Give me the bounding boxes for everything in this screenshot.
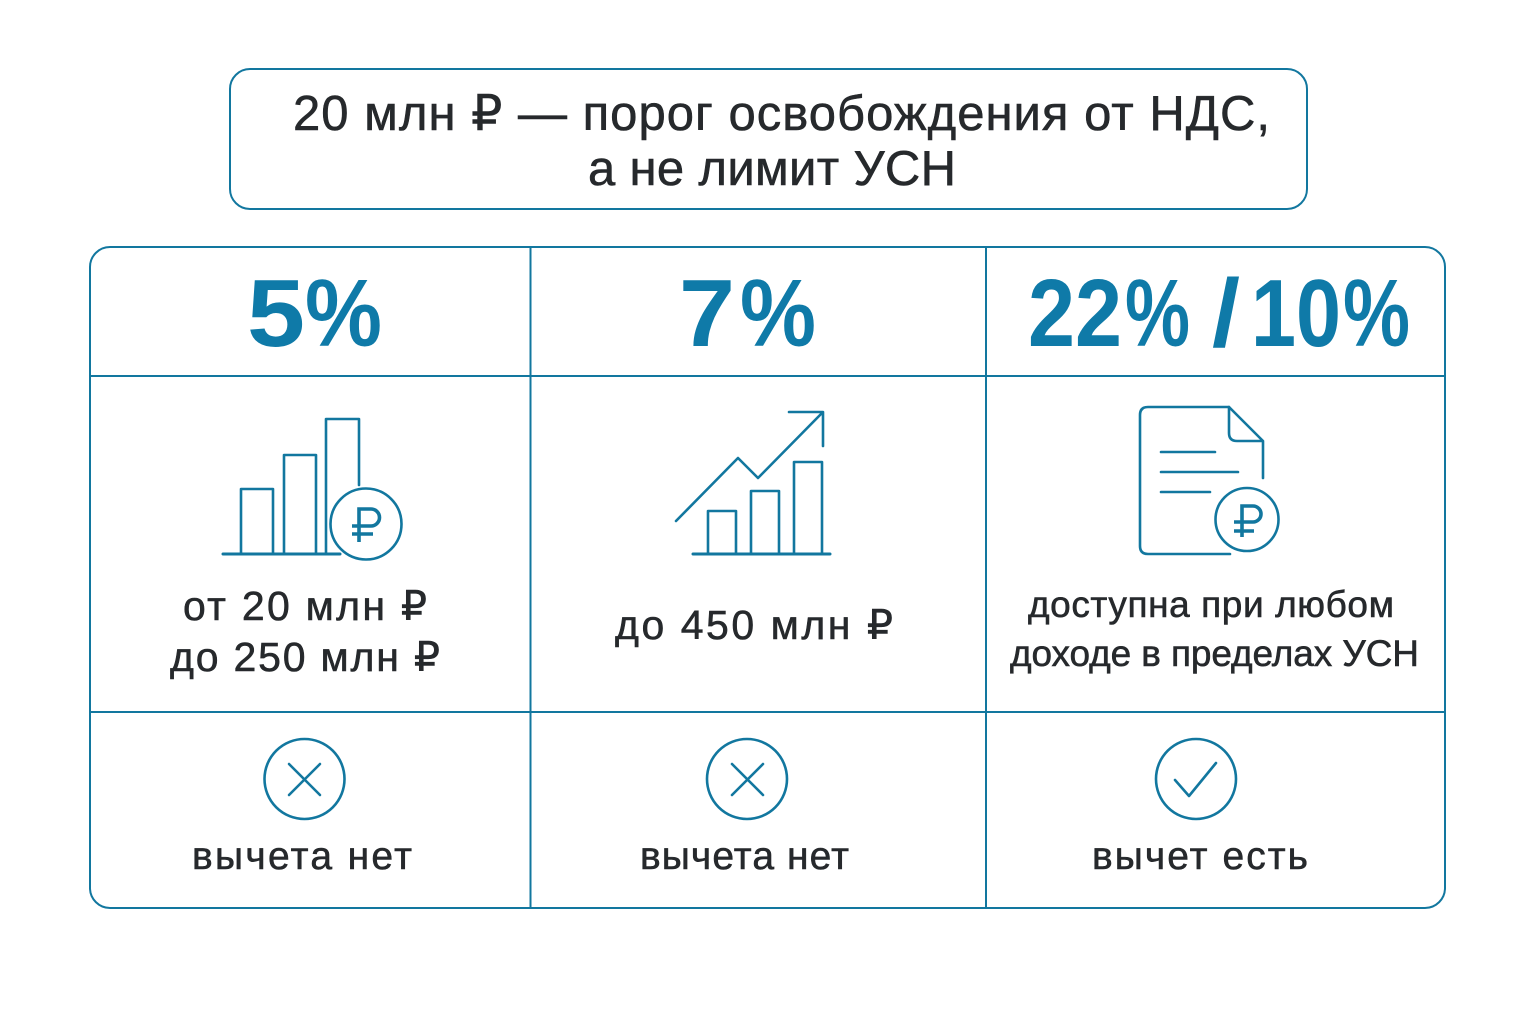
rate: 7%: 7 bbox=[679, 260, 735, 367]
title: 20 млн ₽ — порог освобождения от НДС, bbox=[293, 87, 1270, 141]
text: 5% income range bbox=[170, 583, 440, 680]
text: 5% income range: до 250 млн ₽ bbox=[170, 634, 440, 680]
label: deduction available: вычет есть bbox=[1092, 835, 1308, 878]
rate: 22% / 10%: % bbox=[1343, 260, 1410, 367]
rate: 5%: % bbox=[305, 260, 382, 367]
label: no deduction 2: вычета нет bbox=[640, 835, 849, 878]
icon: cross 1 bbox=[264, 739, 344, 819]
rate: 22% / 10%: 10 bbox=[1251, 260, 1341, 367]
title box bbox=[230, 69, 1307, 209]
rate: 5%: 5 bbox=[247, 260, 305, 367]
icon: bar chart with ruble bbox=[223, 419, 402, 560]
icon: document with ruble bbox=[1140, 407, 1278, 554]
text: 5% income range: от 20 млн ₽ bbox=[183, 583, 427, 629]
rate: 22% / 10% bbox=[1028, 260, 1410, 367]
icon: growth chart with arrow bbox=[676, 412, 830, 554]
rate: 5% bbox=[247, 260, 382, 367]
text: general availability: доступна при любом bbox=[1028, 584, 1394, 625]
icon: check bbox=[1156, 739, 1236, 819]
text: general availability: доходе в пределах УСН bbox=[1010, 633, 1419, 674]
rate: 22% / 10%: / bbox=[1212, 260, 1240, 367]
comparison table bbox=[90, 247, 1445, 908]
label: no deduction 1: вычета нет bbox=[192, 835, 412, 878]
text: general availability bbox=[1010, 584, 1419, 674]
rate: 22% / 10%: 22 bbox=[1028, 260, 1122, 367]
rate: 7% bbox=[679, 260, 816, 367]
title bbox=[293, 87, 1270, 196]
icon: cross 2 bbox=[707, 739, 787, 819]
title: а не лимит УСН bbox=[588, 142, 956, 196]
rate: 7%: % bbox=[740, 260, 816, 367]
text: 7% income range: до 450 млн ₽ bbox=[615, 602, 893, 648]
rate: 22% / 10%: % bbox=[1125, 260, 1190, 367]
